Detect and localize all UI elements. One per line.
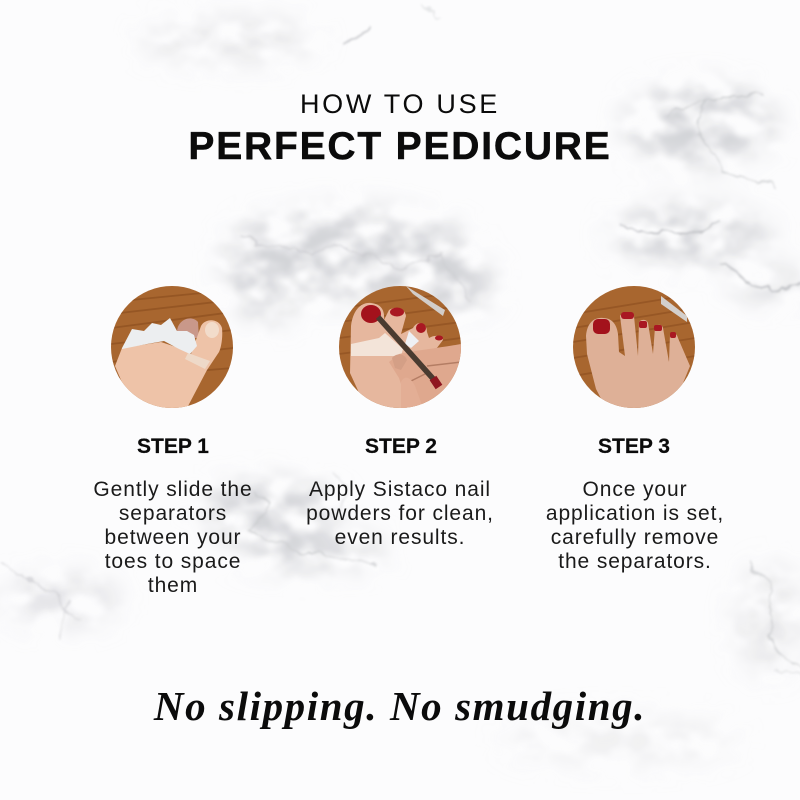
nails [361,305,381,323]
icon: step 2 photo [339,286,461,408]
nail tool [378,317,436,382]
heading: perfect pedicure: PERFECT PEDICURE [188,125,612,168]
step 3 text: Once your [582,478,687,501]
step 3 text: carefully remove [551,526,719,549]
step 1 label: STEP 1 [137,435,209,458]
separator [122,318,197,354]
heading: how to use: HOW TO USE [300,89,500,119]
step 1 text: separators [119,502,227,525]
step 1 text [93,478,253,597]
hand [389,344,461,408]
step 3 text: the separators. [558,550,712,573]
toes and foot [350,303,443,408]
step 2 text: Apply Sistaco nail [309,478,491,501]
step 3 text: application is set, [546,502,724,525]
nails [593,319,610,334]
step 3 label: STEP 3 [598,435,670,458]
step 2 text [306,478,494,549]
step 1 text: between your [105,526,241,549]
icon: step 3 photo [573,286,695,408]
step 2 text: powders for clean, [306,502,494,525]
tool on table [406,286,445,316]
step 1 text: Gently slide the [93,478,253,501]
icon: step 1 photo [111,286,233,408]
tagline: No slipping. No smudging. [154,683,646,729]
step 3 text [546,478,724,573]
step 2 label: STEP 2 [365,435,437,458]
second toe [177,318,199,338]
foot [115,320,222,410]
step 2 text: even results. [335,526,465,549]
step 1 text: toes to space [105,550,241,573]
separator [351,333,403,356]
step 1 text: them [148,574,198,597]
foot [586,312,690,410]
